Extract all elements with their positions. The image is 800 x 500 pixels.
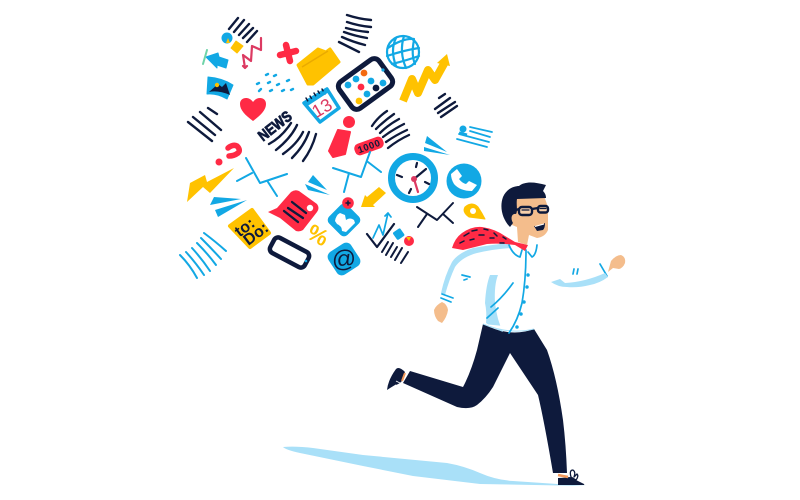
icon: paper plane left <box>210 197 247 217</box>
icon: 1000 counter: 1000 <box>356 138 382 156</box>
hair <box>501 182 546 227</box>
shadow <box>283 447 587 486</box>
icon: news article <box>254 107 316 161</box>
icon: blue profile document <box>457 126 492 147</box>
icon: location pin <box>464 204 485 219</box>
eye lids <box>522 208 546 210</box>
icon: open envelope blue left <box>237 158 287 196</box>
icon cloud <box>180 15 492 278</box>
icon: picture <box>207 77 233 99</box>
icon: at sign tile: @ <box>331 245 357 274</box>
icon: to do note: to: <box>232 215 258 241</box>
icon: pie and diamond <box>222 32 243 53</box>
face <box>510 193 548 245</box>
right sleeve <box>551 273 608 287</box>
placket and folds <box>441 245 607 333</box>
mouth <box>534 223 545 231</box>
trousers <box>403 324 567 473</box>
icon: scattered blue dots <box>257 74 293 91</box>
icon: red zigzag arrow <box>243 38 261 68</box>
icon: 1000 counter <box>353 135 385 157</box>
icon: to do note: Do: <box>241 220 272 249</box>
icon: red cross <box>280 45 296 61</box>
icon: navy phone outline <box>268 236 311 269</box>
icon: news article: NEWS <box>254 107 295 144</box>
icon: text lines top <box>339 15 371 52</box>
left shoe <box>387 368 405 390</box>
icon: text lines right <box>435 94 457 117</box>
icon: heart <box>240 98 266 121</box>
shirt hem <box>483 324 534 331</box>
icon: calendar: 13 <box>308 94 336 122</box>
icon: paper plane top <box>424 136 450 155</box>
icon: contact card <box>326 197 362 238</box>
head <box>501 182 548 245</box>
icon: red speech bubble <box>268 190 318 231</box>
teeth <box>535 224 544 226</box>
icon: lightning bolt <box>187 168 234 202</box>
icon: blue curved lines lower left <box>180 233 226 278</box>
icon: text lines top left <box>229 18 257 42</box>
icon: to do note <box>230 210 272 249</box>
left hand <box>434 302 448 323</box>
icon: open envelope navy <box>417 203 453 227</box>
icon: phone call circle <box>446 164 482 198</box>
icon: rising zigzag arrow <box>403 54 450 101</box>
icon: clock <box>392 156 434 200</box>
shoulder band <box>441 243 511 295</box>
right shoe <box>558 470 584 485</box>
icon: paper plane centre <box>305 175 330 195</box>
icon: text lines centre <box>372 111 409 148</box>
icon: tablet <box>336 56 395 112</box>
man <box>387 182 625 485</box>
right hand <box>608 255 625 272</box>
icon: question mark <box>216 145 239 166</box>
icon: chart with arrow <box>367 213 414 263</box>
icon: folder <box>298 49 339 84</box>
icon: percent sign: % <box>303 219 333 251</box>
glasses <box>516 206 548 215</box>
icon: yellow arrow <box>361 187 386 207</box>
icon: at sign tile <box>325 240 363 278</box>
icon: globe <box>387 36 419 68</box>
icon: text lines left <box>188 108 221 141</box>
shirt <box>441 243 608 333</box>
torso shading <box>485 275 503 332</box>
icon: back arrow <box>203 50 228 68</box>
red tie <box>452 227 528 251</box>
icon: open envelope blue centre <box>333 152 381 192</box>
icon: calendar <box>304 89 339 122</box>
icon: red information i <box>329 116 355 157</box>
